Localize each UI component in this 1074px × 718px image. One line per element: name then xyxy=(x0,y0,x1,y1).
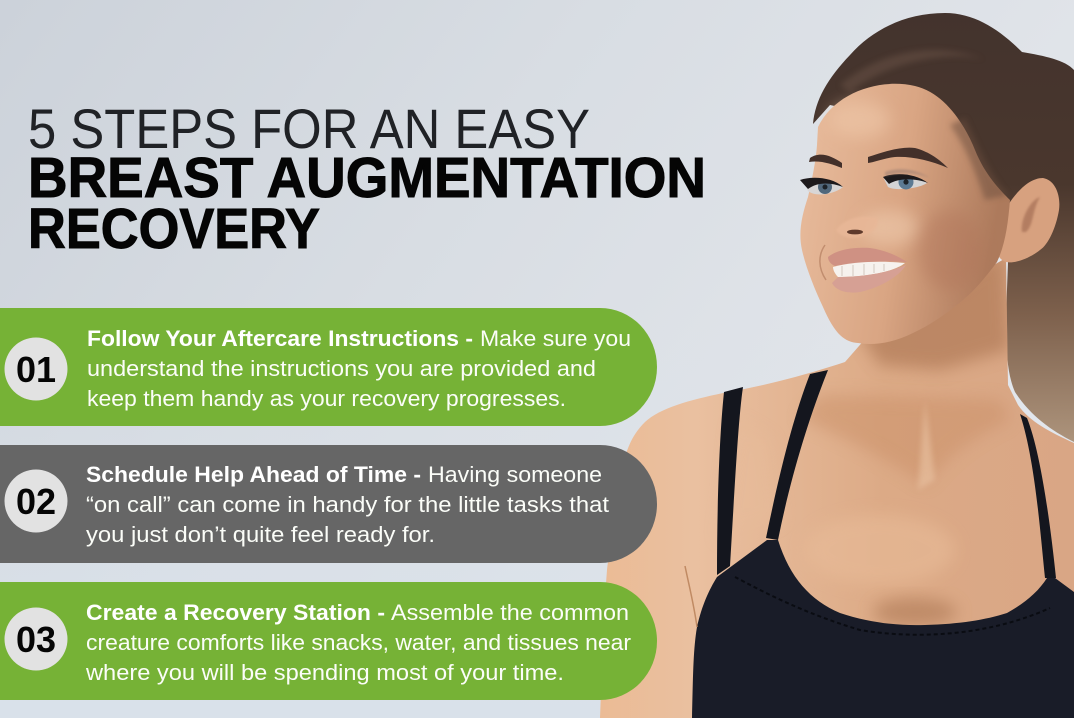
step 01 text: Make sure you xyxy=(480,326,631,351)
title line: 5 steps for an easy: 5 STEPS FOR AN EASY xyxy=(28,97,590,160)
nose xyxy=(836,216,878,238)
step 01 text xyxy=(87,326,631,411)
pill background xyxy=(0,582,657,700)
number badge 01: 01 xyxy=(16,349,56,390)
nostril xyxy=(847,230,863,234)
hairline shadow xyxy=(950,118,1008,200)
ear inner xyxy=(1022,197,1040,232)
step 02 panel xyxy=(0,445,657,563)
cheek blush xyxy=(918,210,982,290)
lower lip xyxy=(832,265,906,293)
arm crease xyxy=(685,566,697,627)
left brow xyxy=(809,155,842,168)
title xyxy=(28,97,706,261)
step 02 text: you just don’t quite feel ready for. xyxy=(86,522,435,547)
step 03 text: Assemble the common xyxy=(391,600,629,625)
step 03 text: creature comforts like snacks, water, and tissues near xyxy=(86,630,631,655)
eye shadow xyxy=(885,169,930,178)
title line: breast augmentation: BREAST AUGMENTATION xyxy=(28,146,706,210)
right eye xyxy=(883,174,928,190)
step 03 text: where you will be spending most of your time. xyxy=(85,660,564,685)
title line: recovery: RECOVERY xyxy=(28,197,320,261)
step 03 text xyxy=(85,600,631,685)
step 02 text xyxy=(86,462,609,547)
right brow xyxy=(868,148,948,168)
top stitching xyxy=(735,577,1050,635)
number badge 03 xyxy=(4,608,68,670)
step 03 panel xyxy=(0,582,657,700)
number badge 02: 02 xyxy=(16,481,56,522)
step 03 text: Create a Recovery Station - xyxy=(86,600,385,625)
step 02 text: Schedule Help Ahead of Time - xyxy=(86,462,421,487)
black sports top xyxy=(692,540,1074,718)
neck and torso xyxy=(600,258,1074,718)
teeth xyxy=(833,262,905,277)
number badge 02 xyxy=(4,470,68,532)
upper lip xyxy=(828,248,907,266)
outer left strap xyxy=(717,387,743,575)
face xyxy=(800,84,1010,344)
chest highlight xyxy=(805,515,955,585)
step 02 text: Having someone xyxy=(428,462,602,487)
pill background xyxy=(0,308,657,426)
hair and ponytail xyxy=(813,13,1074,442)
smile line xyxy=(820,245,826,280)
cheek highlight xyxy=(860,210,920,246)
hair shine xyxy=(840,50,985,92)
photo: smiling woman xyxy=(600,13,1074,718)
forehead highlight xyxy=(830,102,890,138)
step 01 text: understand the instructions you are provided and xyxy=(87,356,596,381)
step 01 panel xyxy=(0,308,657,426)
step 02 text: “on call” can come in handy for the little tasks that xyxy=(86,492,609,517)
number badge 01 xyxy=(4,338,68,400)
number badge 03: 03 xyxy=(16,619,56,660)
cleavage shadow xyxy=(873,598,957,626)
inner left strap xyxy=(766,370,828,540)
right strap xyxy=(1020,414,1056,578)
step 01 text: Follow Your Aftercare Instructions - xyxy=(87,326,473,351)
neck and chest shading xyxy=(810,260,1008,486)
ear xyxy=(998,178,1059,262)
pill background xyxy=(0,445,657,563)
step 01 text: keep them handy as your recovery progresses. xyxy=(87,386,566,411)
left eye xyxy=(800,178,843,194)
